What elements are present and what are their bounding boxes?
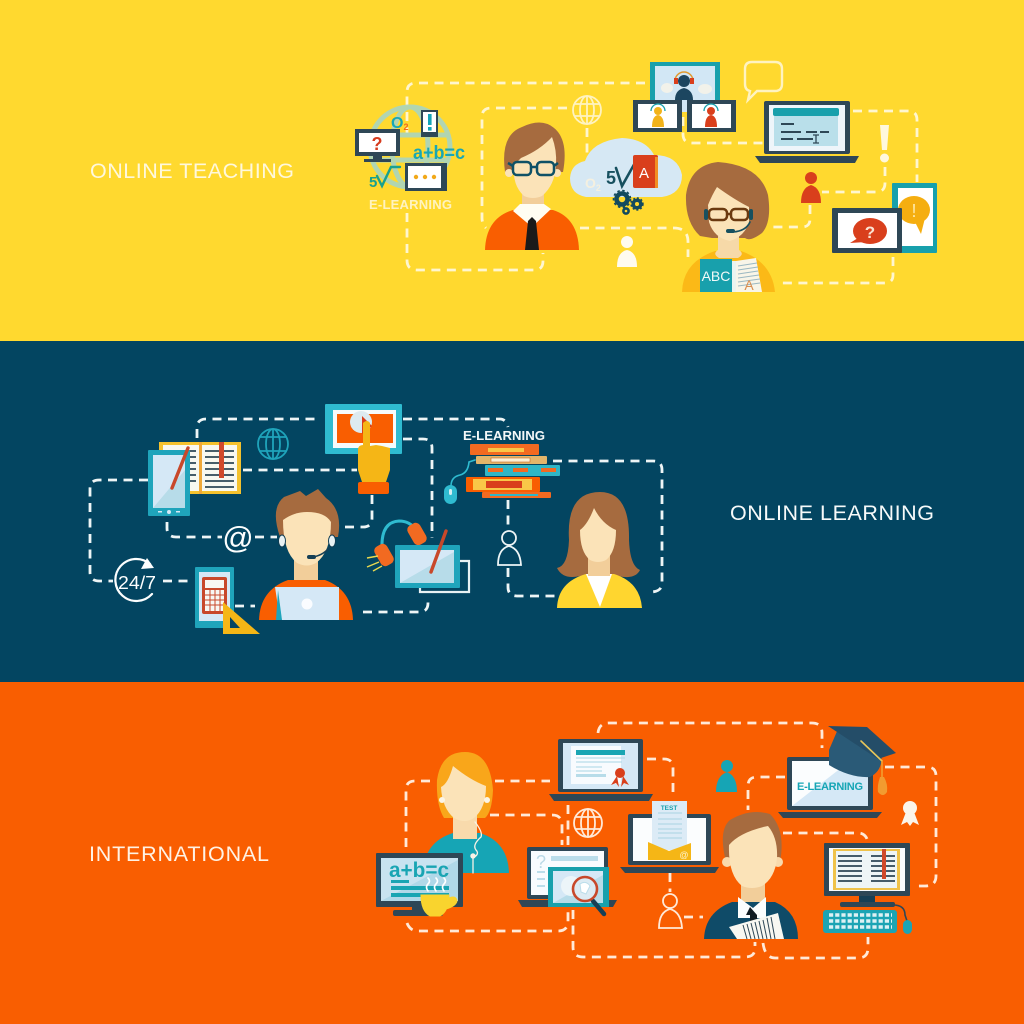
dashed connector lines [90, 419, 662, 612]
icon: laptop with graduation cap [778, 726, 896, 818]
icon: cloud with symbols: 5 [606, 168, 616, 188]
panel: online learning [0, 341, 1024, 682]
icon: teal person [716, 760, 737, 792]
figure: woman with brown hair [557, 492, 642, 608]
icon: headphones and drawing tablet [367, 521, 469, 592]
glasses and headset [709, 209, 748, 220]
icon: gears [614, 190, 643, 214]
icon: exclamation mark [880, 125, 889, 162]
right tablet [687, 100, 736, 132]
left tablet [633, 100, 682, 132]
icon: 24/7 clock: 24/7 [118, 572, 156, 593]
heading: international: INTERNATIONAL [89, 842, 269, 866]
icon: laptop with test and envelope [620, 801, 719, 873]
icon: cloud with symbols: O [585, 175, 596, 191]
icon: computer mouse [444, 460, 475, 504]
video call screens [633, 62, 736, 132]
icon: desktop with book and keyboard [823, 843, 912, 934]
icon: person outline [659, 894, 682, 928]
icon: monitor with equation and cup [376, 853, 463, 916]
dashed connector lines [406, 723, 936, 958]
hand [358, 421, 390, 482]
book: ABC: A [744, 277, 754, 293]
icon: phone with exclamation [421, 110, 438, 137]
icon: laptop with tablet and magnifier [518, 847, 617, 914]
icon: laptop with test and envelope: @ [679, 850, 689, 860]
text: O2: O [391, 115, 403, 132]
coffee cup [421, 895, 457, 916]
icon: calculator tablet with set square [195, 567, 260, 634]
icon: at sign: @ [222, 520, 254, 555]
icon: monitor with equation and cup: a+b=c [389, 859, 449, 882]
icon: laptop with tablet and magnifier: ? [536, 852, 546, 872]
icon: globe [258, 429, 288, 459]
text: equation: a+b=c [413, 143, 465, 164]
icon: cloud with symbols: A [639, 165, 649, 182]
book: ABC [700, 258, 762, 293]
icon: tablet with dots [405, 163, 447, 191]
figure: boy with laptop [259, 489, 353, 620]
icon: tablet with pen [148, 448, 190, 516]
big teal screen [650, 62, 720, 112]
headset [278, 535, 336, 559]
icon: red person [801, 172, 821, 203]
icon: laptop with code [755, 101, 859, 163]
label: e-learning: E-LEARNING [369, 197, 452, 212]
icon: globe [574, 809, 602, 837]
icon: person outline [498, 531, 521, 565]
figure: female teacher [682, 162, 775, 293]
label: e-learning: E-LEARNING [463, 428, 545, 443]
icon: cloud with symbols [570, 138, 682, 214]
book: ABC: ABC [702, 268, 730, 284]
icon: globe [573, 96, 601, 124]
icon: white rosette [901, 801, 919, 826]
icon: laptop with graduation cap: E-LEARNING [797, 781, 863, 793]
icon: cloud with symbols: 2 [596, 183, 601, 193]
e-learning cluster [355, 107, 465, 212]
icon: laptop with test and envelope: TEST [661, 805, 677, 812]
tablets with question and exclamation [832, 183, 937, 253]
icon: video tablet with hand [325, 404, 402, 494]
panel: international [0, 682, 1024, 1024]
icon: stack of books [466, 444, 560, 498]
globe backdrop [370, 107, 450, 187]
glasses [508, 162, 558, 175]
figure: male teacher [485, 123, 579, 250]
icon: laptop with certificate [549, 739, 653, 801]
navy tablet: ? [865, 223, 875, 242]
icon: white person [617, 236, 637, 267]
graduation cap [828, 726, 896, 795]
figure: man with newspaper [704, 812, 798, 939]
text: O2: 2 [403, 122, 408, 132]
dashed connector lines [407, 83, 917, 283]
heading: online teaching: ONLINE TEACHING [90, 159, 294, 183]
teal tablet: ! [911, 201, 917, 221]
icon: speech bubble outline [745, 62, 782, 100]
text: root symbol: 5 [369, 174, 377, 191]
icon: open book with bookmark [159, 442, 241, 494]
panel: online teaching [0, 0, 1024, 341]
icon: 24/7 clock [115, 558, 156, 601]
icon: monitor with question mark: ? [372, 134, 382, 154]
heading: online learning: ONLINE LEARNING [730, 501, 934, 525]
figure: blonde woman with earphones [423, 752, 509, 873]
